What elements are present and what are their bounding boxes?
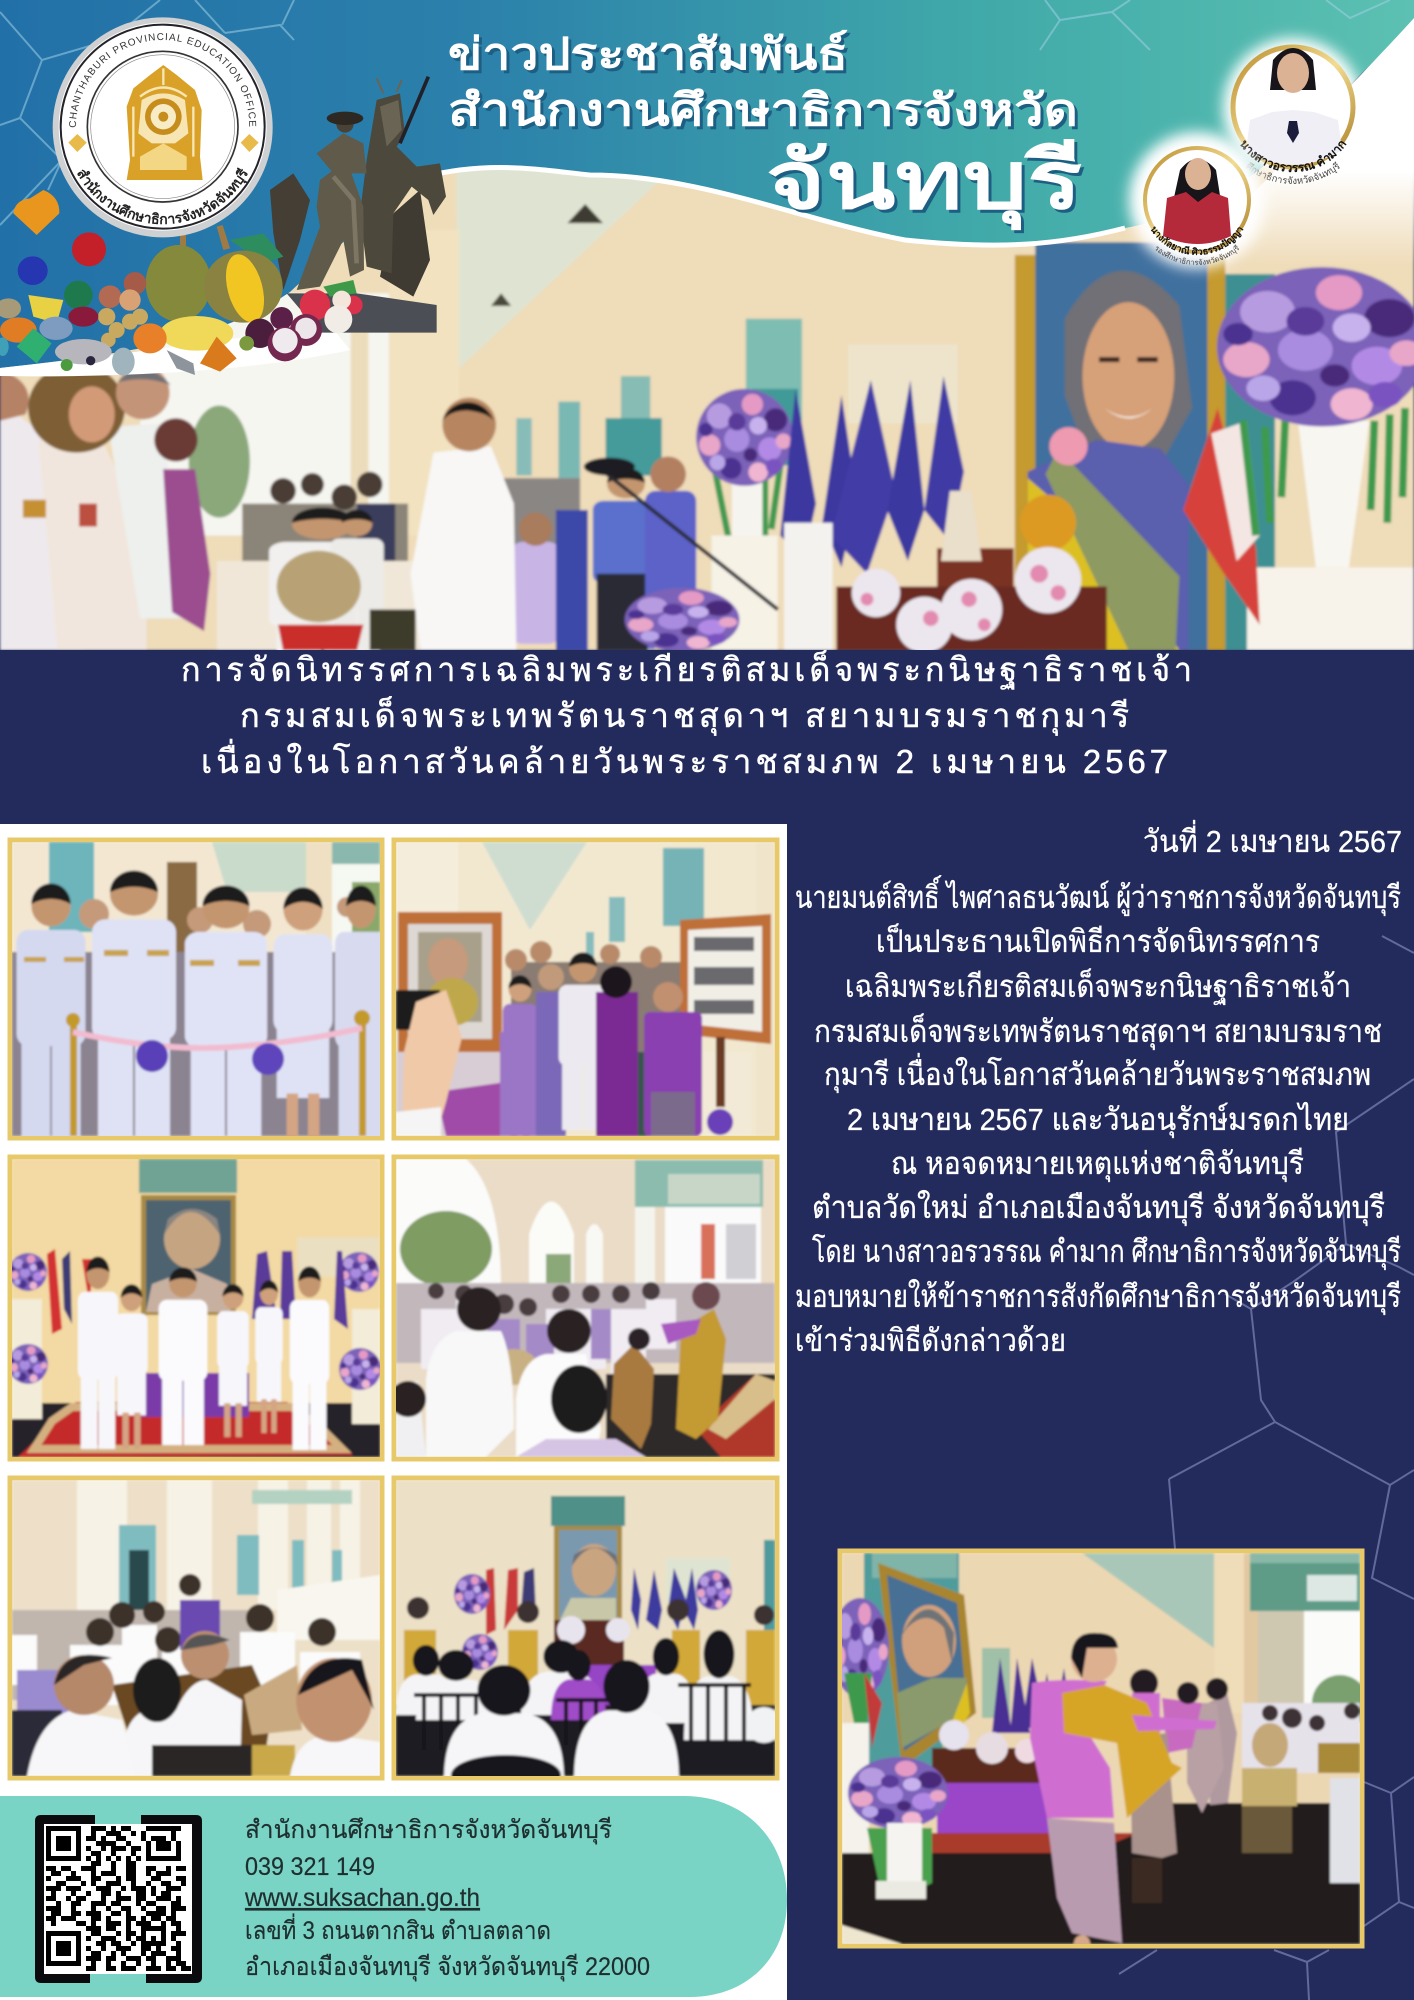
heading line 3: เนื่องในโอกาสวันคล้ายวันพระราชสมภพ 2 เมษายน 2567 <box>201 739 1172 780</box>
hero: offering table <box>836 586 1107 650</box>
photo 4: dance among guests in arched hall <box>390 1157 777 1459</box>
hero: purple flags <box>780 389 816 561</box>
title line 2: สำนักงานศึกษาธิการจังหวัด <box>448 86 1078 135</box>
wave edge highlight <box>423 167 1125 245</box>
QR code <box>35 1815 202 1983</box>
photo 6: dancers before royal portrait <box>394 1478 782 1795</box>
top banner with wave <box>0 0 1414 368</box>
photo 5: Thai classical musicians <box>10 1478 382 1778</box>
white photo panel <box>0 824 787 2000</box>
title line 1: ข่าวประชาสัมพันธ์ <box>448 29 848 79</box>
deputy name: นางกัลยาณี ศิวธรรมปัญญา <box>1150 226 1244 256</box>
director photo <box>1246 48 1342 165</box>
deputy title: รองศึกษาธิการจังหวัดจันทบุรี <box>1156 244 1239 266</box>
hero: right flower stand <box>1247 567 1414 650</box>
banner title <box>448 29 1082 231</box>
hexagon pattern on banner <box>0 0 1390 225</box>
contact footer bar <box>0 1796 787 1997</box>
body line 2: เป็นประธานเปิดพิธีการจัดนิทรรศการ <box>876 923 1320 959</box>
photo 1: ribbon cutting <box>10 840 387 1152</box>
website: www.suksachan.go.th <box>244 1884 480 1912</box>
street address: เลขที่ 3 ถนนตากสิน ตำบลตลาด <box>245 1913 551 1945</box>
hero: officials in foreground <box>0 402 83 650</box>
portrait: provincial education director <box>1212 28 1364 184</box>
office name: สำนักงานศึกษาธิการจังหวัดจันทบุรี <box>245 1816 612 1845</box>
logo: gold emblem <box>127 65 203 180</box>
navy heading band <box>0 650 1414 825</box>
hero: crowd <box>242 504 408 618</box>
body line 7: ณ หอจดหมายเหตุแห่งชาติจันทบุรี <box>891 1146 1304 1183</box>
hero: speaking officer <box>411 446 516 650</box>
white band under fruits <box>0 325 350 376</box>
heading line 2: กรมสมเด็จพระเทพรัตนราชสุดาฯ สยามบรมราชกุมารี <box>240 696 1133 736</box>
hexagon pattern on navy <box>1119 936 1414 2000</box>
hero: microphone stand <box>593 463 778 609</box>
logo: English ring text: CHANTHABURI PROVINCIAL EDUCATION OFFICE <box>69 33 256 128</box>
body line 6: 2 เมษายน 2567 และวันอนุรักษ์มรดกไทย <box>847 1102 1349 1139</box>
hero photo: exhibition opening ceremony <box>0 153 1414 696</box>
hero: teal wall and portrait <box>1205 274 1275 650</box>
statue, logo, fruits and gems cluster <box>0 17 446 376</box>
district and province: อำเภอเมืองจันทบุรี จังหวัดจันทบุรี 22000 <box>245 1953 650 1982</box>
portrait: deputy director <box>1118 122 1273 279</box>
hero: outdoor opening <box>140 293 408 536</box>
photo 3: group portrait on red carpet <box>8 1157 382 1459</box>
photo 2: group with framed portraits <box>394 840 777 1138</box>
photo 7: Thai classical dancers <box>831 1551 1368 1951</box>
body line 3: เฉลิมพระเกียรติสมเด็จพระกนิษฐาธิราชเจ้า <box>845 968 1351 1005</box>
icon: King Taksin statue <box>270 77 446 333</box>
contact details <box>244 1816 650 1982</box>
director title: ศึกษาธิการจังหวัดจันทบุรี <box>1246 161 1340 184</box>
heading line 1: การจัดนิทรรศการเฉลิมพระเกียรติสมเด็จพระกนิษฐาธิราชเจ้า <box>181 650 1196 690</box>
white swoosh right <box>1180 18 1414 265</box>
director name: นางสาวอรวรรณ คำมาก <box>1240 140 1346 172</box>
body line 11: เข้าร่วมพิธีดังกล่าวด้วย <box>795 1323 1066 1358</box>
logo: Thai ring text: สำนักงานศึกษาธิการจังหวัดจันทบุรี <box>77 167 248 224</box>
logo: Chanthaburi Provincial Education Office seal <box>52 17 273 238</box>
icon: fruit (durian, mangosteen, rambutan, longan) <box>98 225 363 361</box>
phone: 039 321 149 <box>245 1853 375 1881</box>
hero: left flower stand <box>714 465 780 542</box>
date: วันที่ 2 เมษายน 2567 <box>1143 820 1402 859</box>
news body text <box>795 874 1401 1358</box>
title line 3: province: จันทบุรี <box>766 136 1082 231</box>
icon: gemstones <box>0 190 237 376</box>
deputy photo <box>1163 158 1231 244</box>
heading: exhibition title <box>181 650 1196 780</box>
